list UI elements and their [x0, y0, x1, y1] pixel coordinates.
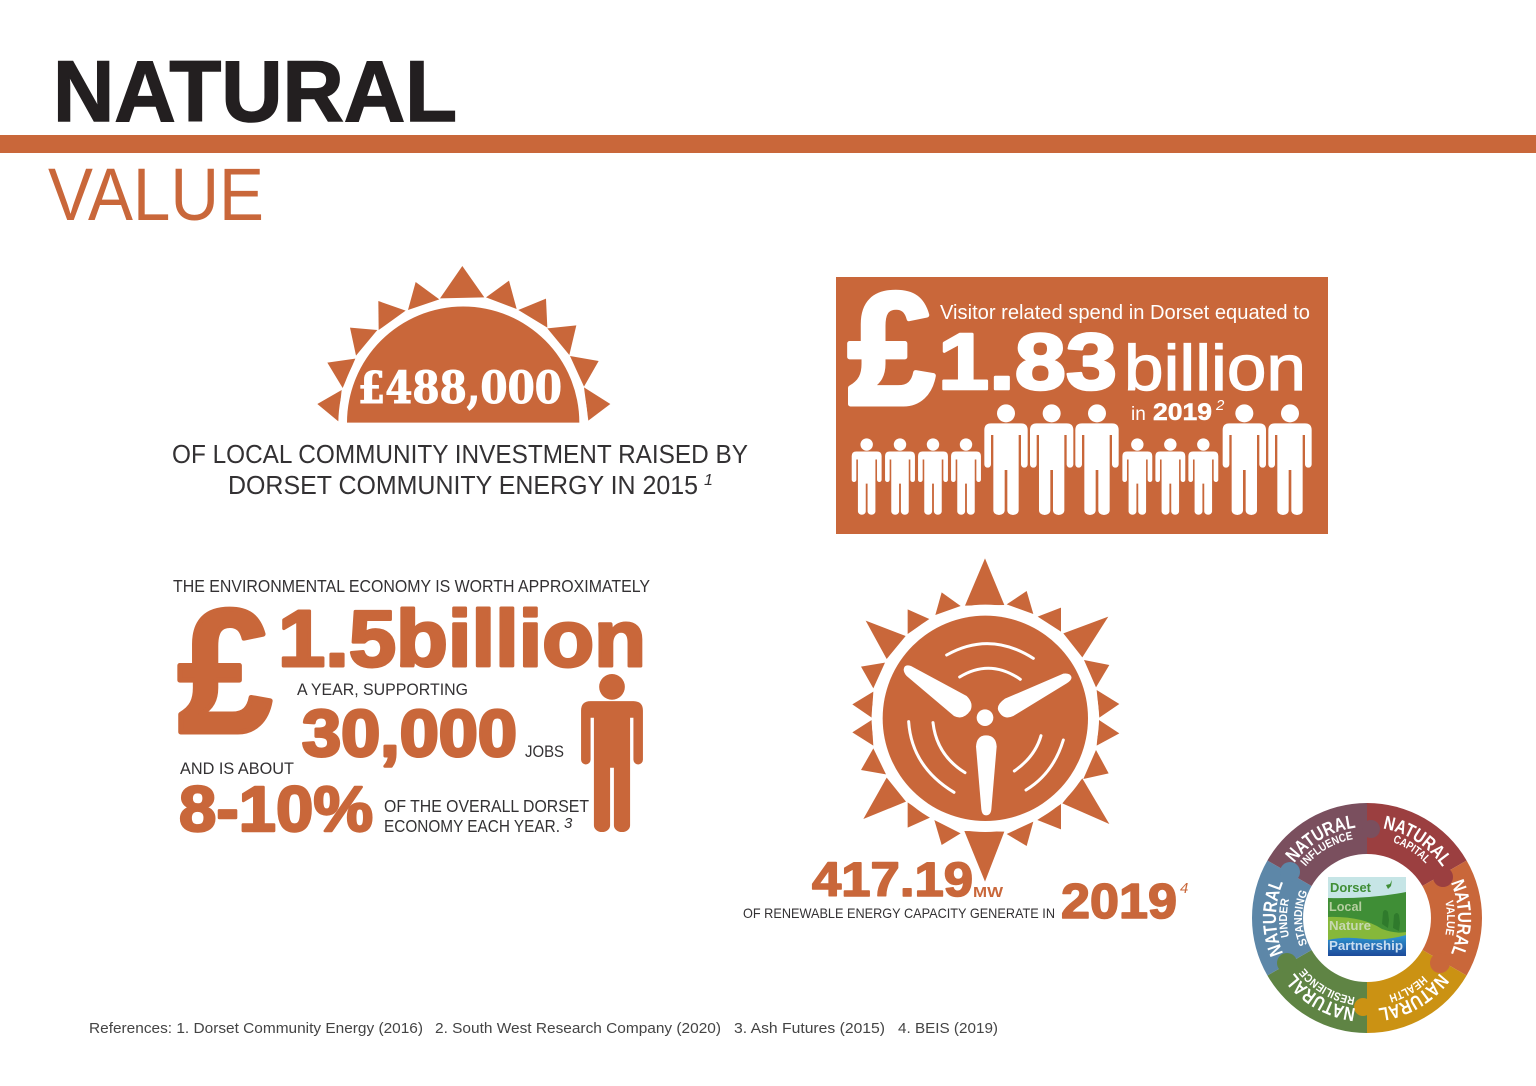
label: natural influence: INFLUENCE [1300, 832, 1353, 866]
text: overall dorset economy [384, 796, 589, 836]
title divider bar [0, 135, 1536, 153]
references [89, 1020, 998, 1037]
label: natural value: VALUE [1445, 900, 1455, 936]
text: in 2019: in [1131, 404, 1146, 425]
panel: natural wheel logo [1252, 803, 1482, 1033]
wheel segments [1252, 803, 1482, 1033]
text: renewable capacity: OF RENEWABLE ENERGY CAPACITY GENERATE IN [743, 905, 1055, 921]
label: natural understanding: STANDING [1294, 890, 1306, 946]
logo: dorset local nature partnership: Local [1329, 899, 1362, 914]
logo: dorset local nature partnership: Nature [1329, 918, 1371, 933]
label: natural influence: NATURAL [1284, 816, 1356, 862]
label: natural capital: NATURAL [1384, 816, 1450, 867]
figure: 1.83: 1.83 [938, 317, 1117, 406]
figure: 2019: 2019 [1061, 875, 1177, 929]
label: natural understanding: NATURAL [1262, 882, 1283, 957]
label: natural resilience: RESILIENCE [1298, 968, 1354, 1005]
references: 3. Ash Futures (2015) [734, 1020, 885, 1037]
icon: row of people [852, 404, 1312, 515]
figure: billion: billion [1124, 332, 1306, 404]
text: economy intro: THE ENVIRONMENTAL ECONOMY IS WORTH APPROXIMATELY [173, 576, 650, 596]
subtitle: VALUE: VALUE [48, 153, 264, 236]
text: visitor spend intro: Visitor related spend in Dorset equated to [940, 302, 1310, 324]
icon: half sun [317, 266, 610, 423]
text: investment line 2: DORSET COMMUNITY ENERGY IN 2015 [228, 470, 698, 500]
label: natural value: NATURAL [1451, 879, 1472, 954]
label: natural health: HEALTH [1389, 976, 1428, 1002]
reference mark 1: 1 [704, 472, 713, 489]
figure: 30,000: 30,000 [302, 696, 517, 770]
label: natural understanding [1262, 882, 1306, 957]
icon: sun with turbine [852, 558, 1119, 882]
logo: dorset local nature partnership [1328, 877, 1406, 956]
text: overall dorset economy: ECONOMY EACH YEAR. [384, 816, 560, 836]
references: References: 1. Dorset Community Energy (2016) [89, 1020, 423, 1037]
label: natural health: NATURAL [1378, 974, 1450, 1020]
label: natural understanding: UNDER [1279, 898, 1289, 938]
figure: £488,000: £488,000 [358, 363, 562, 414]
icon: pound sign: £ [178, 574, 272, 770]
panel: renewable energy [743, 558, 1188, 929]
icon: person [581, 674, 643, 832]
figure: 2019: 2019 [1153, 399, 1212, 426]
figure: 8-10%: 8-10% [179, 773, 373, 845]
references: 4. BEIS (2019) [898, 1020, 998, 1037]
title: NATURAL: NATURAL [53, 44, 457, 140]
text: and is about: AND IS ABOUT [180, 759, 294, 778]
reference mark 4: 4 [1180, 880, 1188, 897]
reference mark 3: 3 [564, 815, 573, 832]
label: natural resilience: NATURAL [1288, 973, 1355, 1022]
panel background [836, 277, 1328, 534]
figure: 1.5billion: 1.5billion [278, 594, 646, 683]
text: overall dorset economy: OF THE OVERALL DORSET [384, 796, 589, 816]
logo: dorset local nature partnership: Dorset [1330, 880, 1372, 895]
panel: environmental economy [173, 574, 650, 845]
icon: pound sign: £ [848, 259, 935, 438]
reference mark 2: 2 [1215, 397, 1225, 414]
text: jobs: JOBS [525, 742, 564, 761]
text: investment line 1: OF LOCAL COMMUNITY INVESTMENT RAISED BY [172, 439, 748, 469]
label: natural capital: CAPITAL [1394, 836, 1429, 864]
panel: visitor spend [836, 259, 1328, 534]
figure: 417.19: 417.19 [812, 854, 973, 907]
text: a year, supporting: A YEAR, SUPPORTING [297, 680, 468, 699]
figure: MW: MW [973, 884, 1004, 901]
references: 2. South West Research Company (2020) [435, 1020, 721, 1037]
logo: dorset local nature partnership: Partnership [1329, 938, 1403, 953]
panel: community investment [172, 266, 748, 500]
